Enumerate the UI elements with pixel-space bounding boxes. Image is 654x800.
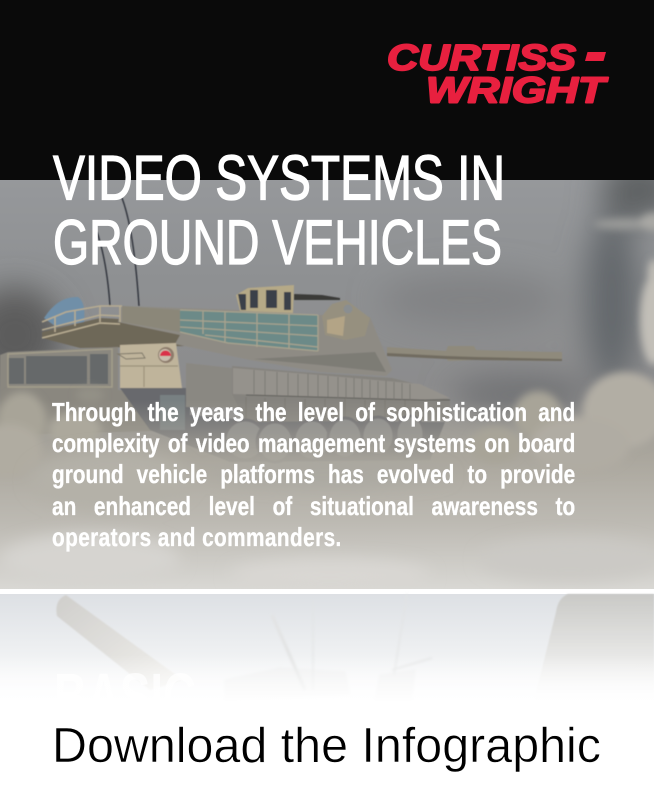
intro paragraph: an enhanced level of situational awareness to [52,491,575,521]
side skirt [233,368,450,400]
ghost gun barrel [56,595,183,690]
logo: Curtiss-Wright: WRIGHT [426,70,608,110]
smoke covering hull [0,408,654,504]
lower hull shadow [120,388,445,462]
intro paragraph: Through the years the level of sophistication and [52,397,575,427]
basket rails [42,306,122,338]
black header band [0,0,654,180]
turret body [118,306,392,376]
red marker [158,347,174,363]
turret front bustle [324,300,368,318]
road wheels [226,414,422,451]
cupola [236,285,294,313]
ghost antennas and turret [225,594,432,700]
ghost right shape [533,594,654,705]
ghost heading: BASIC [54,660,196,732]
photo panel: tank in smoke [0,160,654,591]
logo: Curtiss-Wright [387,37,608,110]
antennas [122,198,139,306]
light wisps right [593,213,654,365]
divider band [0,589,654,594]
tank [0,198,562,462]
intro paragraph: ground vehicle platforms has evolved to provide [52,459,575,489]
light stowage box [120,343,182,388]
basket underside [42,318,184,348]
machine gun [294,294,340,300]
logo: Curtiss-Wright: CURTISS [387,37,576,78]
dark smoke [0,160,654,415]
rear basket dome [44,297,84,326]
intro paragraph: operators and commanders. [52,522,342,552]
lower teaser panel [0,594,654,732]
title: VIDEO SYSTEMS IN [53,144,505,214]
gun barrel [387,346,562,361]
green panels [180,310,318,351]
intro paragraph [52,397,575,552]
intro paragraph: complexity of video management systems on board [52,428,575,458]
title [53,144,505,278]
download call to action: Download the Infographic [52,719,601,773]
hull block [186,364,238,408]
title: GROUND VEHICLES [53,208,502,278]
rear hull [0,348,150,432]
